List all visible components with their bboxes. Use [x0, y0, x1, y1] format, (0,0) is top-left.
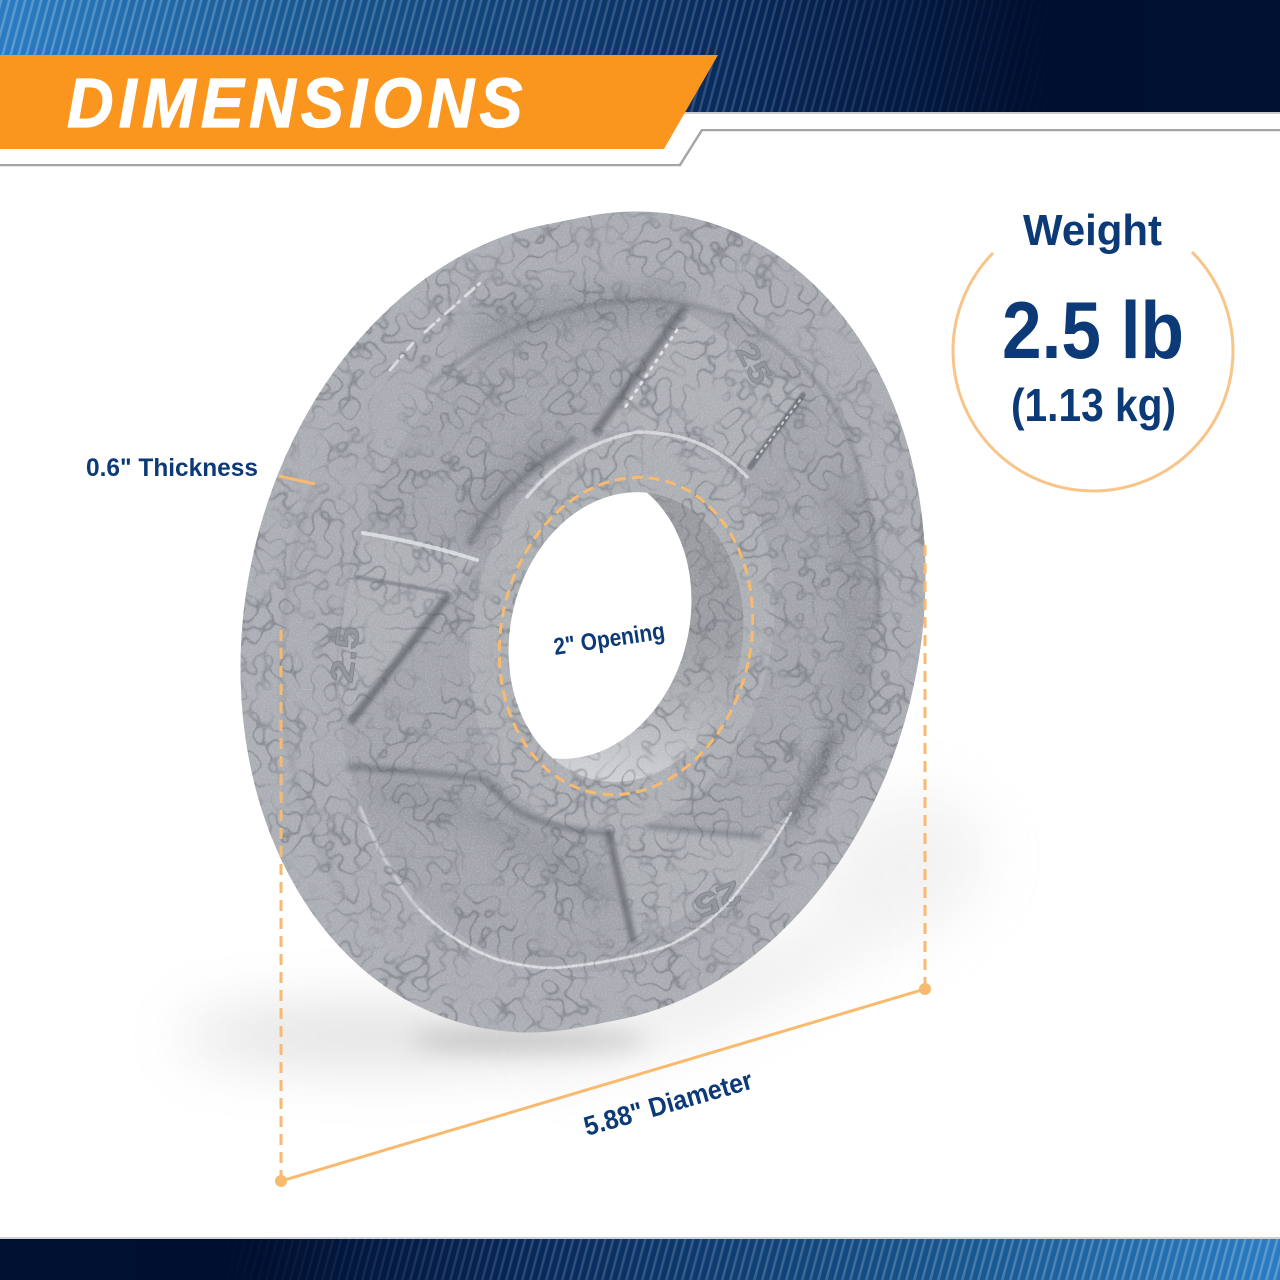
spoke: bottom right	[649, 813, 791, 928]
plate recess	[275, 247, 941, 1023]
title: DIMENSIONS	[67, 65, 523, 143]
embossed numbers	[323, 337, 778, 925]
opening inner wall	[482, 470, 770, 804]
floor shadow	[180, 764, 1013, 1088]
embossed numbers: 25	[729, 337, 778, 390]
central hub	[433, 403, 811, 861]
spoke: bottom	[609, 827, 662, 942]
spoke: top	[600, 310, 808, 470]
diameter label: 5.88" Diameter	[580, 1065, 756, 1142]
diameter dimension	[275, 545, 931, 1187]
badge heading: Weight	[1023, 206, 1162, 255]
badge arc	[953, 252, 1233, 491]
title banner	[0, 55, 718, 149]
header outline stroke	[0, 114, 1280, 165]
center opening	[508, 492, 692, 759]
plate front face	[578, 212, 926, 1021]
embossed numbers: 25	[690, 874, 747, 925]
header banner	[0, 0, 1280, 114]
footer banner	[0, 1237, 1280, 1280]
embossed numbers: 2.5	[323, 624, 367, 685]
opening dashed outline	[470, 454, 782, 818]
badge value: 2.5 lb	[1002, 286, 1184, 376]
thickness label: 0.6" Thickness	[86, 454, 258, 482]
rib shadows and highlights	[349, 283, 803, 968]
plate texture	[240, 212, 926, 1032]
spoke: left	[336, 533, 477, 724]
badge metric value: (1.13 kg)	[1011, 379, 1176, 431]
weight plate	[240, 212, 926, 1032]
plate rim edge shading	[281, 484, 345, 900]
opening label: 2" Opening	[552, 618, 667, 661]
weight badge	[953, 206, 1233, 491]
plate body	[240, 212, 926, 1032]
